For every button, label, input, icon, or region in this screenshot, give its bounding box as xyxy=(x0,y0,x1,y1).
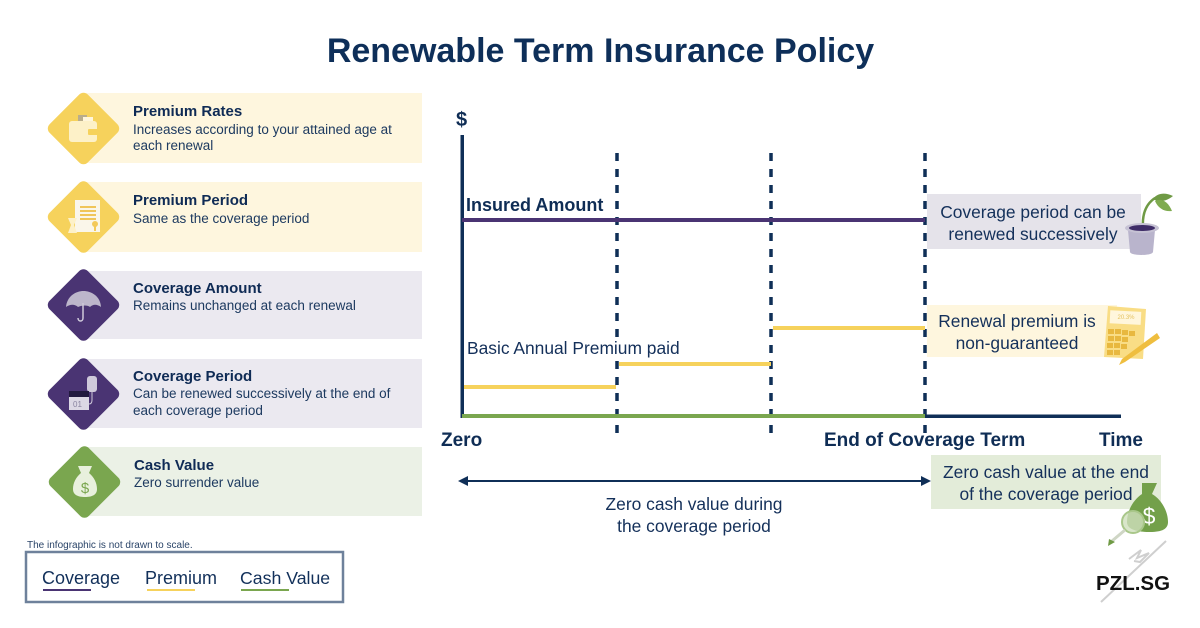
y axis label: $ xyxy=(456,109,467,131)
text: premium rates: Premium Rates xyxy=(133,103,242,120)
callout: renewal premium: Renewal premium is xyxy=(938,311,1096,331)
label: basic annual premium: Basic Annual Premium paid xyxy=(467,338,680,358)
panel: premium rates xyxy=(45,90,422,167)
text: premium rates: each renewal xyxy=(133,138,213,153)
icon: calculator and pencil: 20.3% xyxy=(1117,315,1135,321)
legend: coverage: Coverage xyxy=(42,568,120,588)
text: premium rates: Increases according to your attained age at xyxy=(133,122,392,137)
coverage line xyxy=(462,218,925,222)
y axis xyxy=(460,135,464,418)
icon: calendar and drip: 01 xyxy=(73,400,82,409)
text: cash value: Cash Value xyxy=(134,457,214,474)
callout: renewed successively: renewed successively xyxy=(948,224,1118,244)
arrow: coverage period span xyxy=(458,476,931,486)
icon: wallet xyxy=(45,90,122,167)
label: zero cash value during period xyxy=(606,494,782,536)
label: zero cash value during period: the coverage period xyxy=(617,516,771,536)
text: cash value xyxy=(134,457,259,490)
label: insured amount: Insured Amount xyxy=(466,195,603,215)
text: premium period: Same as the coverage period xyxy=(133,211,309,226)
text: premium rates xyxy=(133,103,392,153)
label: end of coverage term: End of Coverage Term xyxy=(824,430,1025,451)
panel: coverage period xyxy=(45,356,422,432)
callout: renewed successively: Coverage period can be xyxy=(940,202,1126,222)
icon: money bag: $ xyxy=(81,480,90,497)
label: zero: Zero xyxy=(441,430,482,451)
callout: renewal premium: non-guaranteed xyxy=(956,333,1078,353)
legend: premium: Premium xyxy=(145,568,217,588)
icon: plant pot xyxy=(1125,194,1173,255)
icon: money bag and magnifier xyxy=(1108,483,1168,546)
period dividers xyxy=(617,153,925,434)
icon: umbrella xyxy=(45,267,122,343)
logo: PZL.SG: PZL.SG xyxy=(1096,572,1170,595)
text: coverage period xyxy=(133,368,391,418)
callout: renewal premium xyxy=(927,305,1160,365)
text: cash value: Zero surrender value xyxy=(134,475,259,490)
title: Renewable Term Insurance Policy xyxy=(327,32,874,70)
icon: money bag xyxy=(46,444,123,520)
panel: cash value xyxy=(46,444,422,520)
text: coverage period: Can be renewed successively at the end of xyxy=(133,386,391,401)
label: time: Time xyxy=(1099,430,1143,451)
text: coverage amount: Coverage Amount xyxy=(133,280,262,297)
text: coverage period: Coverage Period xyxy=(133,368,252,385)
cash value line xyxy=(462,414,925,418)
legend xyxy=(26,552,343,602)
callout: zero cash value at end xyxy=(931,455,1168,546)
icon: calendar and drip xyxy=(45,356,122,432)
logo: PZL.SG xyxy=(1096,541,1170,602)
icon: calculator and pencil xyxy=(1104,306,1160,365)
note: not to scale: The infographic is not drawn to scale. xyxy=(27,540,193,551)
text: premium period: Premium Period xyxy=(133,192,248,209)
text: coverage amount xyxy=(133,280,356,313)
text: coverage period: each coverage period xyxy=(133,403,263,418)
panel: premium period xyxy=(45,179,422,255)
chart: term insurance timeline xyxy=(441,109,1143,536)
text: coverage amount: Remains unchanged at each renewal xyxy=(133,298,356,313)
legend: cash value: Cash Value xyxy=(240,568,330,588)
icon: money bag and magnifier: $ xyxy=(1143,503,1156,529)
callout: renewed successively xyxy=(927,194,1173,255)
text: premium period xyxy=(133,192,309,226)
callout: zero cash value at end: Zero cash value at the end xyxy=(943,462,1149,482)
panel: coverage amount xyxy=(45,267,422,343)
callout: zero cash value at end: of the coverage period xyxy=(959,484,1133,504)
premium steps xyxy=(464,326,925,389)
icon: certificate xyxy=(45,179,122,255)
label: zero cash value during period: Zero cash value during xyxy=(606,494,782,514)
x axis xyxy=(925,414,1121,418)
